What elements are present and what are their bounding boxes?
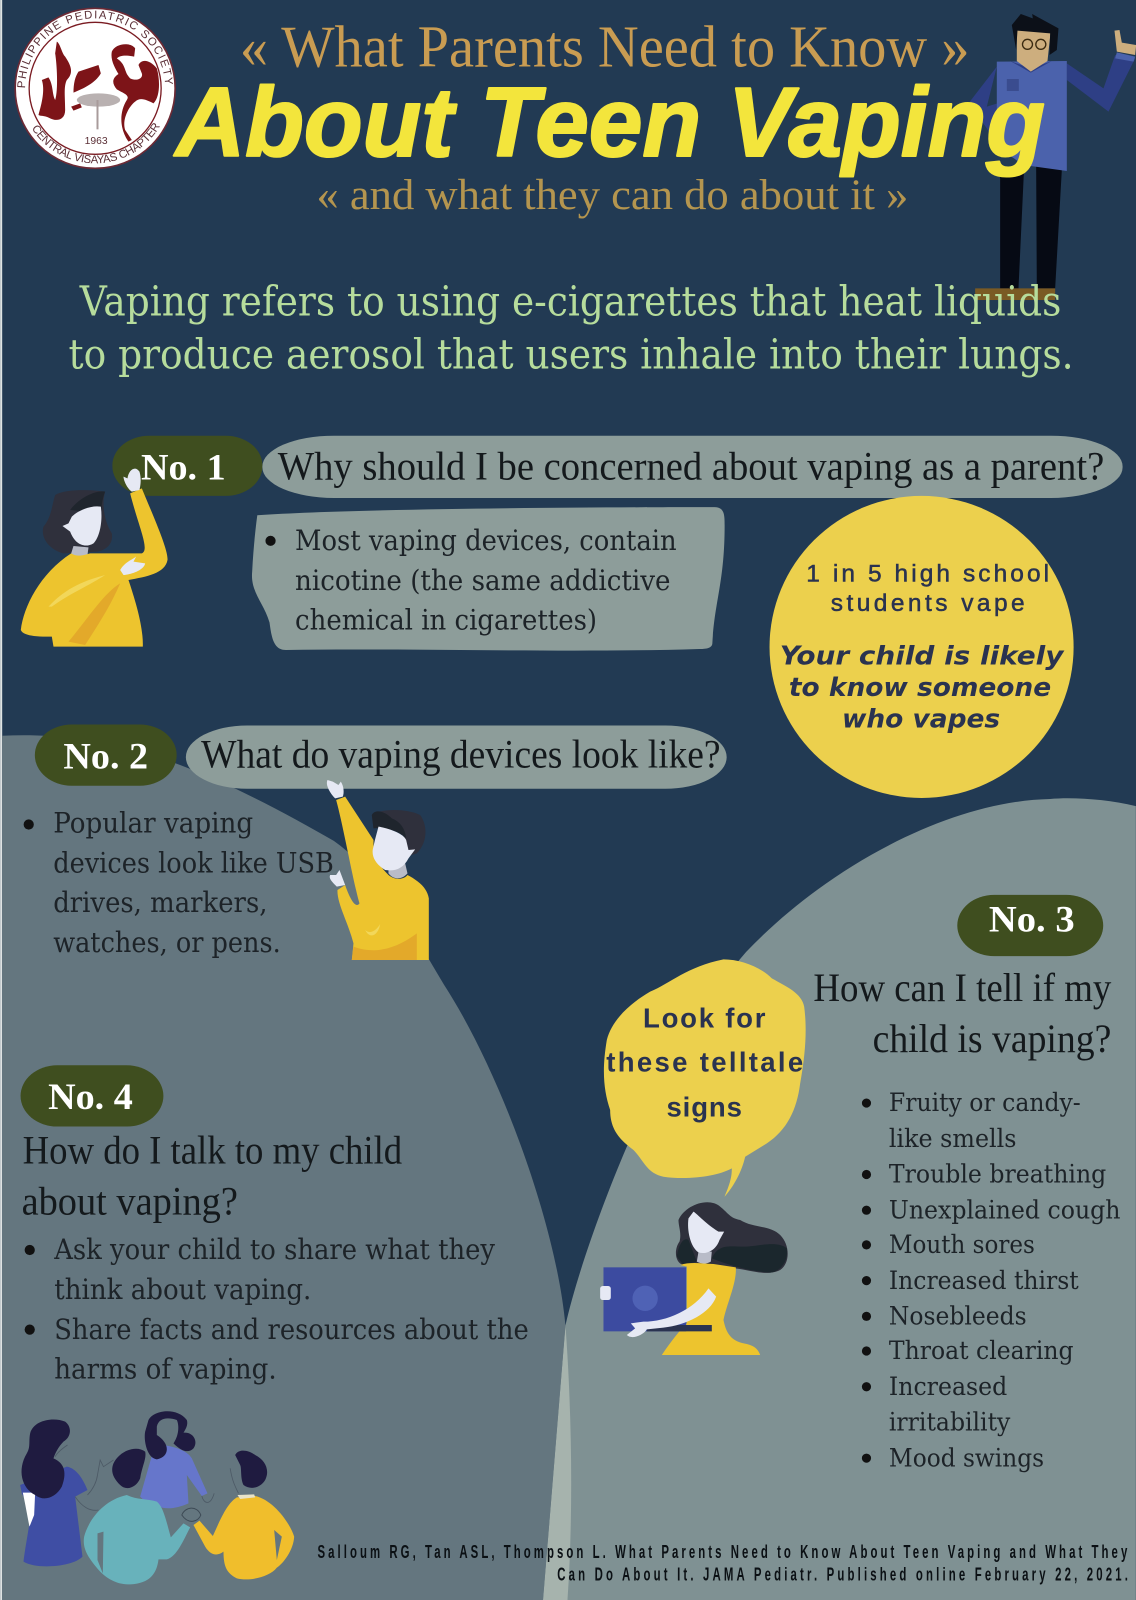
callout: 1 in 5 statistic circle: to know someone [789, 673, 1051, 703]
speech bubble: telltale signs: Look for [643, 1003, 766, 1034]
text: answer 4: Ask your child to share what they [53, 1234, 495, 1266]
list: telltale signs: Fruity or candy- [889, 1088, 1081, 1118]
heading: question 4: about vaping? [22, 1179, 238, 1223]
definition text [69, 277, 1074, 378]
badge: No. 1 [112, 436, 262, 496]
text: answer 4: think about vaping. [54, 1274, 311, 1306]
list: telltale signs: Trouble breathing [889, 1160, 1106, 1190]
icon: family group talking [20, 1411, 294, 1584]
text: answer 2: drives, markers, [53, 887, 267, 919]
callout: 1 in 5 statistic circle [770, 496, 1074, 798]
list: telltale signs: Mood swings [889, 1443, 1044, 1473]
logo: Philippine Pediatric Society [14, 8, 176, 170]
heading: question 1 [262, 436, 1123, 498]
callout: 1 in 5 statistic circle: Your child is likely [780, 641, 1065, 671]
speech bubble: telltale signs: these telltale [606, 1046, 803, 1077]
callout: 1 in 5 statistic circle: 1 in 5 high school [806, 561, 1049, 588]
badge: No. 2: No. 2 [63, 735, 148, 776]
list: telltale signs: Unexplained cough [889, 1195, 1121, 1225]
heading: question 2: What do vaping devices look like? [201, 732, 721, 776]
badge: No. 4: No. 4 [48, 1076, 133, 1117]
citation [317, 1543, 1128, 1585]
icon: girl holding tablet [600, 1202, 788, 1355]
text box: answer 1: chemical in cigarettes) [295, 605, 597, 637]
text box: answer 1: Most vaping devices, contain [295, 525, 677, 557]
text: answer 2 [24, 808, 334, 959]
citation: Can Do About It. JAMA Pediatr. Published online February 22, 2021. [557, 1565, 1128, 1585]
list: telltale signs: Increased thirst [889, 1266, 1079, 1296]
callout: 1 in 5 statistic circle: who vapes [842, 705, 1000, 735]
list: telltale signs: irritability [889, 1408, 1011, 1438]
logo: Philippine Pediatric Society: PHILIPPINE PEDIATRIC SOCIETY [17, 10, 173, 88]
subtitle: « and what they can do about it » [316, 172, 908, 219]
list: telltale signs [862, 1088, 1121, 1473]
heading: question 4: How do I talk to my child [23, 1128, 402, 1172]
logo: Philippine Pediatric Society: CENTRAL VISAYAS CHAPTER [33, 123, 160, 164]
definition text: Vaping refers to using e-cigarettes that heat liquids [79, 277, 1061, 325]
list: telltale signs: like smells [889, 1124, 1016, 1154]
badge: No. 3: No. 3 [989, 899, 1075, 940]
badge: No. 1: No. 1 [141, 447, 226, 488]
heading: question 2 [186, 726, 727, 789]
badge: No. 4 [21, 1065, 163, 1127]
text: answer 2: devices look like USB [53, 847, 334, 879]
heading: question 3 [813, 966, 1111, 1061]
icon: woman raising hand [21, 469, 168, 647]
panel: left background curve [2, 735, 565, 1600]
text: answer 2: Popular vaping [53, 808, 253, 840]
text: answer 4: harms of vaping. [54, 1354, 277, 1386]
heading: question 3: child is vaping? [873, 1017, 1111, 1061]
light sliver between panels [543, 1326, 571, 1600]
logo: Philippine Pediatric Society: 1963 [85, 136, 108, 147]
text: answer 2: watches, or pens. [53, 927, 281, 959]
definition text: to produce aerosol that users inhale into their lungs. [69, 330, 1074, 378]
badge: No. 2 [35, 724, 177, 786]
list: telltale signs: Mouth sores [889, 1230, 1035, 1260]
speech bubble: telltale signs: signs [666, 1091, 742, 1122]
list: telltale signs: Increased [889, 1372, 1007, 1402]
list: telltale signs: Nosebleeds [889, 1301, 1027, 1331]
title: About Teen Vaping: About Teen Vaping [173, 67, 1045, 177]
text box: answer 1: nicotine (the same addictive [295, 565, 671, 597]
panel: right background curve [565, 798, 1136, 1600]
list: telltale signs: Throat clearing [889, 1336, 1074, 1366]
icon: man with glasses waving [968, 14, 1136, 300]
heading: question 1: Why should I be concerned about vaping as a parent? [278, 445, 1104, 489]
heading: question 4 [22, 1128, 402, 1223]
text: answer 4: Share facts and resources about the [54, 1314, 529, 1346]
callout: 1 in 5 statistic circle: students vape [831, 590, 1025, 617]
badge: No. 3 [957, 895, 1103, 956]
text: answer 4 [25, 1234, 529, 1386]
title: What Parents Need to Know: « What Parents Need to Know » [240, 13, 970, 79]
speech bubble: telltale signs [604, 959, 806, 1197]
icon: man pointing up [327, 780, 429, 960]
citation: Salloum RG, Tan ASL, Thompson L. What Parents Need to Know About Teen Vaping and What They [317, 1543, 1128, 1563]
heading: question 3: How can I tell if my [813, 966, 1111, 1010]
text box: answer 1 [252, 507, 725, 651]
